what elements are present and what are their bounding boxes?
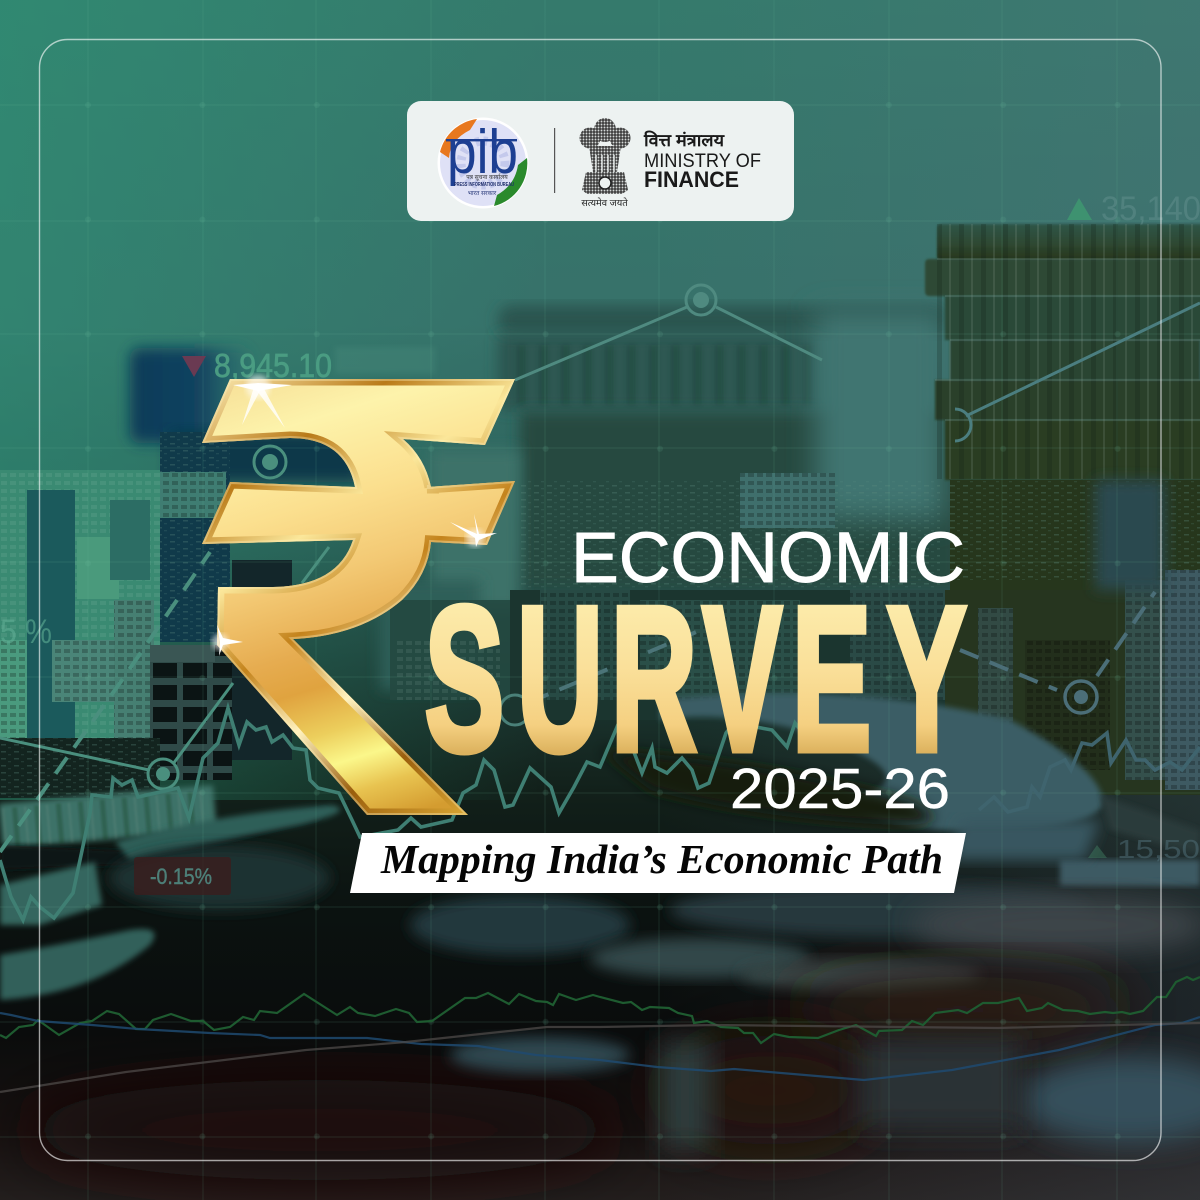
icon: national emblem: सत्यमेव जयते	[581, 197, 628, 209]
tagline banner	[350, 833, 966, 893]
icon: PIB logo: PRESS INFORMATION BUREAU	[454, 182, 514, 188]
chart overlay: network lines and nodes	[0, 285, 1200, 852]
ticker: -0.15% badge	[134, 857, 231, 895]
background: right coin stack	[925, 224, 1200, 610]
chart overlay: grey line	[0, 1023, 1200, 1092]
ministry text: FINANCE	[644, 167, 739, 192]
logo panel	[407, 101, 794, 221]
ministry text: MINISTRY OF	[644, 150, 761, 172]
icon: PIB logo: पत्र सूचना कार्यालय	[466, 173, 508, 181]
heading: ECONOMIC: ECONOMIC	[571, 519, 965, 598]
ticker: 15,50: 15,50	[1117, 834, 1200, 864]
icon: national emblem	[580, 118, 630, 209]
chart overlay: blue line	[0, 1013, 1200, 1080]
heading: SURVEY: SURVEY	[425, 564, 967, 794]
rupee symbol	[202, 375, 515, 815]
icon: PIB logo	[438, 118, 528, 208]
chart overlay: zigzag price line	[0, 708, 803, 920]
tagline banner: Mapping India’s Economic Path	[380, 836, 943, 882]
ministry text: वित्त मंत्रालय	[643, 130, 725, 150]
heading: year: 2025-26	[730, 757, 950, 821]
icon: PIB logo: भारत सरकार	[468, 191, 497, 197]
sparkle: right	[450, 514, 497, 547]
chart overlay: zigzag price line, right	[979, 733, 1200, 812]
divider	[554, 128, 555, 193]
chart overlay: green line	[0, 977, 1200, 1043]
ministry text	[643, 130, 761, 192]
sparkle: lower left	[212, 625, 243, 656]
background: city, centre and right	[390, 473, 1200, 795]
ticker: 8,945.10: 8,945.10	[214, 347, 332, 384]
icon: PIB logo: pib	[447, 118, 518, 187]
background: city, left	[0, 432, 292, 798]
ticker: -0.15% badge: -0.15%	[150, 864, 212, 889]
ticker: 15,50	[1088, 834, 1200, 864]
sparkle: top left	[233, 375, 292, 428]
ticker: percent: 5 %	[0, 613, 52, 651]
background: blurred coin stacks and mist	[130, 305, 960, 690]
background: blurred foreground coins	[0, 693, 1200, 1180]
